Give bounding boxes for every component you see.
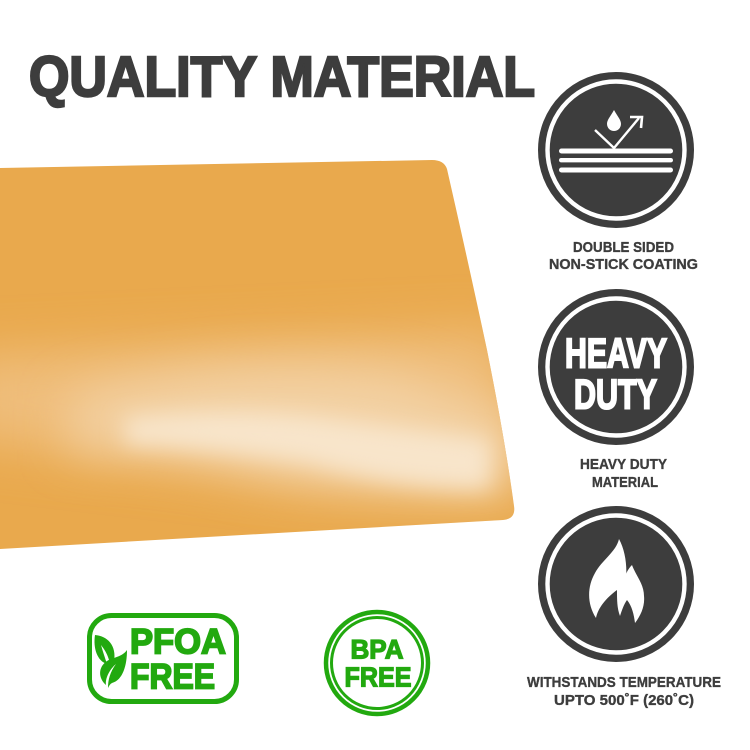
icon: heavy duty badge bbox=[542, 293, 690, 441]
label: withstands temperature bbox=[527, 675, 721, 709]
label: double sided non-stick coating: NON-STICK COATING bbox=[549, 257, 698, 273]
icon: heavy duty badge: DUTY bbox=[574, 370, 657, 418]
label: heavy duty material bbox=[580, 457, 667, 491]
badge: PFOA free bbox=[90, 616, 236, 702]
icon: leaves bbox=[94, 635, 127, 688]
badge: PFOA free: PFOA bbox=[130, 622, 226, 662]
badge: PFOA free: FREE bbox=[130, 658, 215, 696]
badge: BPA free: FREE bbox=[344, 662, 412, 692]
label: withstands temperature: UPTO 500˚F (260˚C) bbox=[554, 693, 694, 709]
label: heavy duty material: MATERIAL bbox=[592, 475, 658, 491]
label: double sided non-stick coating: DOUBLE SIDED bbox=[573, 240, 674, 256]
icon: double sided non-stick coating bbox=[542, 76, 690, 224]
badge: BPA free: BPA bbox=[350, 634, 404, 664]
label: double sided non-stick coating bbox=[549, 240, 698, 273]
product photo: orange baking sheet bbox=[0, 150, 530, 560]
badge: BPA free bbox=[326, 612, 428, 714]
icon: heavy duty badge: HEAVY bbox=[565, 330, 667, 376]
title: QUALITY MATERIAL bbox=[29, 45, 535, 109]
label: heavy duty material: HEAVY DUTY bbox=[580, 457, 667, 473]
label: withstands temperature: WITHSTANDS TEMPERATURE bbox=[527, 675, 721, 691]
icon: flame heat resistance bbox=[542, 510, 690, 658]
